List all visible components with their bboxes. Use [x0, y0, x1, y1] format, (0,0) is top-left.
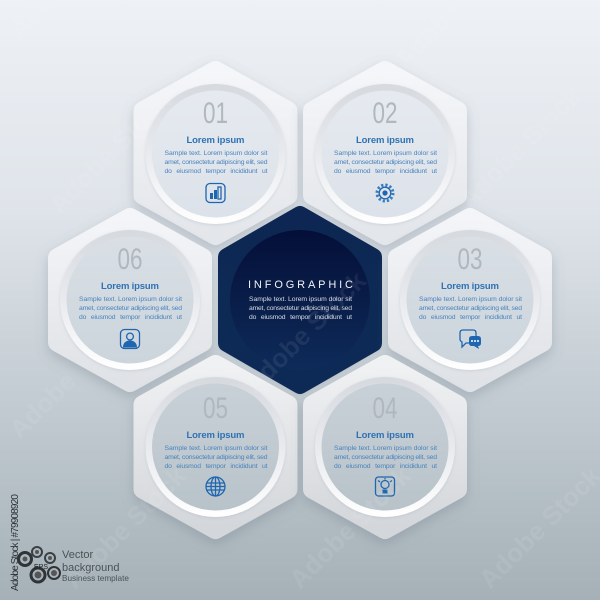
- watermark: Adobe Stock: [453, 80, 587, 214]
- hexagon 04: Sample text. Lorem ipsum dolor sit: [334, 445, 437, 452]
- center hexagon: infographic: INFOGRAPHIC: [248, 279, 353, 291]
- watermark: Adobe Stock: [43, 85, 177, 219]
- hexagon 02: Lorem ipsum: [356, 135, 414, 146]
- hexagon 04: do eiusmod tempor incididunt ut: [334, 463, 437, 470]
- footer text: Vector: [62, 549, 94, 561]
- hexagon 04: amet, consectetur adipiscing elit, sed: [334, 454, 437, 461]
- hexagon 05: Sample text. Lorem ipsum dolor sit: [164, 445, 268, 452]
- watermark: Adobe: [3, 366, 81, 444]
- hexagon 05: Lorem ipsum: [186, 430, 244, 441]
- hexagon 03: do eiusmod tempor incididunt ut: [419, 314, 522, 321]
- watermark: Adobe Stock: [283, 460, 417, 594]
- side credit: Adobe Stock | #79908920: [10, 494, 21, 591]
- hexagon 04: Lorem ipsum: [356, 430, 414, 441]
- hexagon 06: Lorem ipsum: [101, 281, 159, 292]
- hexagon 06: amet, consectetur adipiscing elit, sed: [79, 305, 182, 312]
- hexagon 01: amet, consectetur adipiscing elit, sed: [164, 159, 268, 166]
- footer text: Business template: [62, 574, 129, 583]
- hexagon 02: Sample text. Lorem ipsum dolor sit: [334, 150, 437, 157]
- icon: light bulb: [376, 477, 394, 496]
- hexagon 05: 05: [203, 392, 228, 425]
- footer text: [62, 549, 129, 583]
- hexagon 01: 01: [203, 97, 228, 130]
- hexagon 04: [313, 365, 457, 529]
- hexagon 06: 06: [118, 243, 142, 276]
- hexagon 06: Sample text. Lorem ipsum dolor sit: [79, 296, 182, 303]
- hexagon 03: Sample text. Lorem ipsum dolor sit: [419, 296, 522, 303]
- hexagon 06: [58, 218, 202, 382]
- icon: person: [120, 330, 140, 348]
- hexagon 02: do eiusmod tempor incididunt ut: [334, 168, 437, 175]
- center hexagon: infographic: [227, 215, 373, 385]
- hexagon 03: [398, 218, 542, 382]
- hexagon 03: Lorem ipsum: [441, 281, 499, 292]
- center hexagon: infographic: amet, consectetur adipiscing elit, sed: [249, 305, 352, 312]
- hexagon 05: [144, 365, 288, 529]
- watermark: Adobe Stock: [238, 265, 372, 399]
- icon: chat bubbles: [460, 330, 481, 349]
- hexagon 01: Sample text. Lorem ipsum dolor sit: [164, 150, 268, 157]
- hexagon 01: Lorem ipsum: [186, 135, 244, 146]
- footer text: background: [62, 562, 120, 574]
- hexagon 02: [313, 71, 457, 235]
- hexagon 04: 04: [372, 392, 398, 425]
- hexagon 01: [144, 71, 288, 235]
- watermark: Adobe Stock: [58, 460, 192, 594]
- icon: bar chart: [206, 184, 225, 202]
- hexagon 01: do eiusmod tempor incididunt ut: [164, 168, 268, 175]
- center hexagon: infographic: do eiusmod tempor incididunt ut: [249, 314, 352, 321]
- hexagon 03: 03: [458, 243, 482, 276]
- icon: gear: [377, 185, 393, 201]
- logo: EPS rings: EPS: [34, 564, 48, 571]
- icon: globe: [206, 477, 225, 496]
- hexagon 05: amet, consectetur adipiscing elit, sed: [164, 454, 268, 461]
- hexagon 03: amet, consectetur adipiscing elit, sed: [419, 305, 522, 312]
- logo: EPS rings: [18, 547, 60, 582]
- hexagon 02: 02: [372, 97, 398, 130]
- hexagon 02: amet, consectetur adipiscing elit, sed: [334, 159, 437, 166]
- center hexagon: infographic: Sample text. Lorem ipsum dolor sit: [249, 296, 352, 303]
- hexagon 05: do eiusmod tempor incididunt ut: [164, 463, 268, 470]
- hexagon 06: do eiusmod tempor incididunt ut: [79, 314, 182, 321]
